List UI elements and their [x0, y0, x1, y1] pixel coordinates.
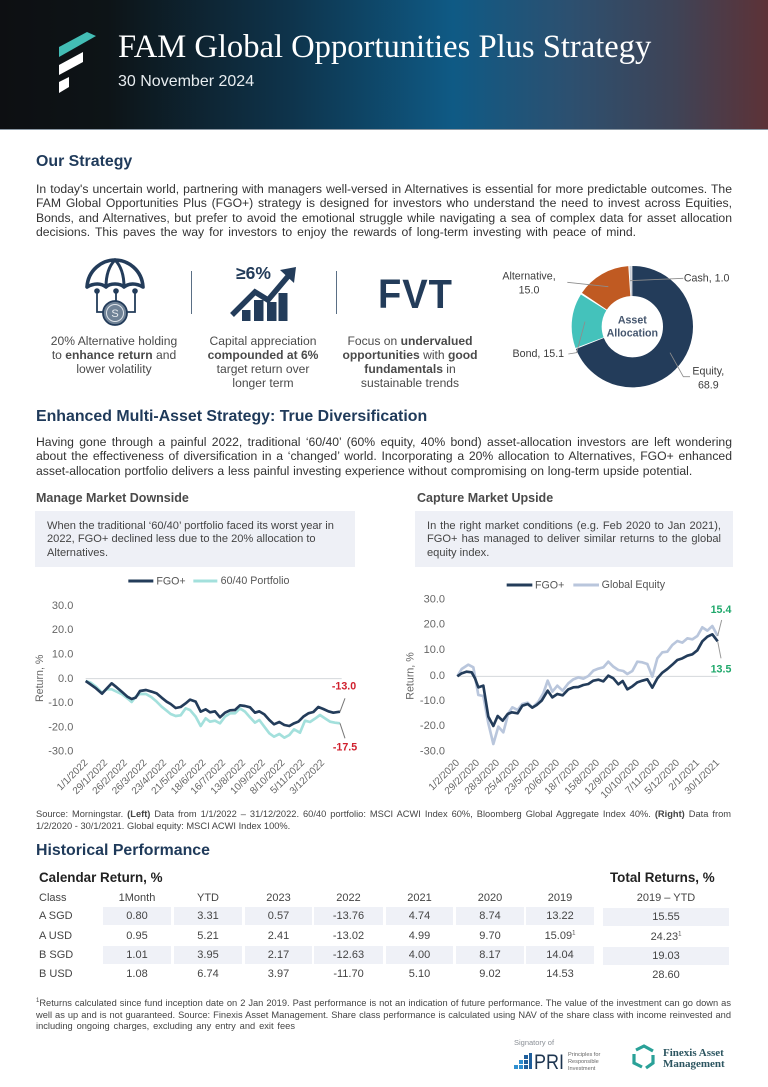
logo: Finexis Asset Management: Management	[663, 1058, 725, 1070]
row: A USD: -13.02	[333, 930, 364, 942]
x axis dates	[427, 757, 722, 801]
legend: FGO+	[535, 580, 564, 592]
divider	[336, 271, 337, 314]
logo: Finexis Asset Management	[632, 1044, 725, 1070]
logo: PRI signatory: Signatory of	[514, 1038, 555, 1047]
callout: downside: Alternatives.	[47, 546, 108, 558]
row: B SGD: 8.17	[479, 949, 501, 961]
heading: historical performance: Historical Performance	[36, 842, 210, 859]
row: A SGD: 4.74	[409, 910, 430, 922]
row: A SGD: 15.55	[652, 911, 680, 923]
row: A USD: 4.99	[409, 930, 430, 942]
icon: growth chart	[230, 263, 296, 321]
line: global equity	[457, 626, 718, 744]
row: A SGD: 0.57	[268, 910, 289, 922]
callout: downside: 2022, FGO+ declined less due to the 20% allocation to	[47, 533, 316, 545]
logo mark	[59, 32, 96, 93]
caption: alternative holding	[51, 334, 177, 376]
x axis dates: 16/7/2022	[189, 757, 228, 797]
x axis dates: 8/10/2022	[248, 757, 288, 797]
logo: PRI signatory: Principles for	[568, 1052, 600, 1058]
callout: downside: When the traditional ‘60/40’ portfolio faced its worst year in	[47, 520, 334, 532]
chart source note: 1/2/2020 - 30/1/2021. Global equity: MSCI ACWI Index 100%.	[36, 821, 290, 831]
row: B SGD: 3.95	[197, 949, 219, 961]
donut chart: asset allocation: 68.9	[698, 380, 719, 392]
title: FAM Global Opportunities Plus Strategy	[118, 29, 651, 65]
subheading: manage market downside: Manage Market Downside	[36, 491, 189, 505]
strategy paragraph: FAM Global Opportunities Plus (FGO+) strategy is designed for investors who understand the need to invest across Equities,	[36, 196, 732, 210]
y axis: -20.0	[48, 721, 73, 733]
donut chart: asset allocation: Equity,	[692, 365, 724, 377]
caption: capital appreciation: longer term	[232, 376, 294, 390]
donut chart: asset allocation: Asset	[618, 315, 647, 327]
column headers: YTD	[197, 892, 219, 904]
callout: upside: equity index.	[427, 546, 489, 558]
y axis: 10.0	[52, 649, 73, 661]
column headers: 2022	[336, 892, 361, 904]
column headers	[39, 892, 695, 904]
row: B USD: B USD	[39, 968, 73, 980]
x axis dates: 21/5/2022	[150, 757, 189, 797]
caption: capital appreciation: Capital appreciation	[210, 334, 316, 348]
end labels: 13.5	[711, 663, 731, 675]
footnote: including ongoing charges, excluding any entry and exit fees	[36, 1021, 295, 1031]
row: B USD: 28.60	[652, 969, 680, 981]
logo: Finexis Asset Management: Finexis Asset	[663, 1047, 724, 1059]
logo: PRI signatory: Investment	[568, 1066, 596, 1072]
line: 60/40 portfolio	[86, 681, 340, 738]
row: B SGD: 4.00	[409, 949, 430, 961]
callout: upside: FGO+ has managed to deliver similar returns to the global	[427, 533, 721, 545]
column headers: 2021	[407, 892, 432, 904]
caption: fvt focus: opportunities with good	[342, 348, 478, 362]
y axis: 10.0	[424, 644, 445, 656]
column headers: Class	[39, 892, 67, 904]
x axis dates: 29/1/2022	[71, 757, 110, 797]
y axis: 0.0	[430, 670, 445, 682]
row: A USD: 2.41	[268, 930, 289, 942]
column headers: 2023	[266, 892, 291, 904]
strategy paragraph: Bonds, and Alternatives, but prefer to avoid the emotional struggle while navigating a sea of complex data for asset allocation	[36, 211, 732, 225]
logo: PRI signatory: Responsible	[568, 1059, 599, 1065]
y axis: 20.0	[424, 619, 445, 631]
diversification paragraph: about the effectiveness of diversification in a ‘changed’ world. Incorporating a 20% allocation to Alternatives, FGO+ enhanced	[36, 449, 732, 463]
x axis dates: 7/11/2020	[623, 757, 662, 796]
row: B USD: 6.74	[197, 968, 219, 980]
donut chart: asset allocation: Cash, 1.0	[684, 273, 730, 285]
caption: capital appreciation: target return over	[217, 362, 309, 376]
x axis dates: 25/4/2020	[483, 757, 522, 797]
header banner	[0, 0, 768, 130]
x axis dates	[55, 757, 327, 797]
row: B USD: -11.70	[333, 968, 364, 980]
x axis dates: 30/1/2021	[683, 757, 722, 797]
logo: PRI signatory: PRI	[534, 1051, 564, 1074]
legend: FGO+	[156, 576, 186, 588]
x axis dates: 12/9/2020	[583, 757, 622, 797]
row: B SGD	[39, 946, 729, 965]
strategy paragraph: decisions. This paves the way for investors to enjoy the rewards of long-term investing with peace of mind.	[36, 225, 636, 239]
x axis dates: 23/5/2020	[503, 757, 542, 797]
row: B SGD: 14.04	[546, 949, 574, 961]
column headers: 2019 – YTD	[637, 892, 695, 904]
x axis dates: 15/8/2020	[563, 757, 602, 797]
row: B USD: 3.97	[268, 968, 289, 980]
caption: capital appreciation: compounded at 6%	[208, 348, 318, 362]
y axis: -30.0	[48, 746, 73, 758]
y axis	[34, 600, 73, 758]
x axis dates: 29/2/2020	[443, 757, 482, 797]
x axis dates: 10/9/2022	[229, 757, 268, 797]
row: A USD: 9.70	[479, 930, 501, 942]
chart source note	[36, 809, 731, 831]
column headers: 2019	[548, 892, 572, 904]
table title: total returns: Total Returns, %	[610, 870, 715, 885]
x axis dates: 2/1/2021	[667, 757, 702, 793]
legend: 60/40 Portfolio	[221, 575, 289, 587]
row: A USD: 0.95	[126, 930, 148, 942]
callout: upside: In the right market conditions (e.g. Feb 2020 to Jan 2021),	[427, 520, 721, 532]
x axis dates: 10/10/2020	[599, 757, 642, 801]
x axis dates: 28/3/2020	[463, 757, 502, 797]
row: A USD	[39, 930, 682, 943]
x axis dates: 13/8/2022	[209, 757, 248, 797]
caption: fvt focus: Focus on undervalued	[347, 334, 473, 348]
performance table	[39, 870, 729, 981]
legend: Global Equity	[602, 579, 666, 591]
diversification paragraph	[36, 435, 732, 478]
x axis dates: 3/12/2022	[288, 757, 327, 797]
y axis: 30.0	[52, 600, 73, 612]
strategy paragraph	[36, 182, 732, 239]
row: B USD: 14.53	[546, 968, 574, 980]
table title: calendar return: Calendar Return, %	[39, 870, 163, 885]
row: B SGD: 2.17	[268, 949, 289, 961]
end labels	[711, 604, 731, 675]
diversification paragraph: Having gone through a painful 2022, traditional ‘60/40’ (60% equity, 40% bond) asset-allocation investors are left wondering	[36, 435, 732, 449]
end labels	[332, 681, 357, 753]
y axis: 20.0	[52, 624, 73, 636]
diversification paragraph: asset-allocation portfolio delivers a less painful investing experience without compromising on long-term upside potential.	[36, 464, 692, 478]
x axis dates: 5/11/2022	[268, 757, 307, 796]
x axis dates: 18/6/2022	[169, 757, 209, 797]
caption: fvt focus: fundamentals in	[364, 362, 456, 376]
row: B USD: 1.08	[126, 968, 148, 980]
caption: alternative holding: to enhance return and	[52, 348, 176, 362]
heading: our strategy: Our Strategy	[36, 153, 132, 170]
y axis: -10.0	[420, 695, 445, 707]
row: A SGD: A SGD	[39, 910, 73, 922]
end labels: -17.5	[333, 741, 357, 753]
strategy paragraph: In today's uncertain world, partnering with managers well-versed in Alternatives is essential for more predictable outcomes. The	[36, 182, 732, 196]
y axis: -10.0	[48, 697, 73, 709]
icon: growth chart: ≥6%	[236, 263, 271, 283]
caption: capital appreciation	[208, 334, 318, 390]
report date: 30 November 2024	[118, 73, 254, 90]
footnote: 1Returns calculated since fund inception date on 2 Jan 2019. Past performance is not an indication of future performance. The value of the investment can go down as	[36, 998, 731, 1008]
donut chart: asset allocation: Bond, 15.1	[513, 348, 564, 360]
row: B SGD: B SGD	[39, 949, 73, 961]
footnote	[36, 998, 731, 1031]
caption: fvt focus	[342, 334, 478, 390]
row: A USD: 5.21	[197, 930, 219, 942]
y axis: Return, %	[34, 654, 46, 702]
row: A SGD: 3.31	[197, 910, 219, 922]
chart source note: Source: Morningstar. (Left) Data from 1/1/2022 – 31/12/2022. 60/40 portfolio: MSCI ACWI Index 60%, Bloomberg Global Aggregate Index 40%. (Right) Data from	[36, 809, 731, 819]
x axis dates: 26/3/2022	[110, 757, 150, 797]
row: A SGD: -13.76	[333, 910, 364, 922]
x axis dates: 1/1/2022	[55, 757, 91, 793]
caption: fvt focus: sustainable trends	[361, 376, 459, 390]
footnote: well as up and is not guaranteed. Source: Finexis Asset Management. Share class performance is calculated using NAV of the share class with income reinvested and	[36, 1010, 731, 1020]
row: A SGD: 8.74	[479, 910, 501, 922]
icon: FVT wordmark: FVT	[378, 271, 453, 317]
y axis: Return, %	[405, 652, 417, 700]
x axis dates: 18/7/2020	[543, 757, 582, 797]
caption: alternative holding: lower volatility	[76, 362, 152, 376]
line: FGO+	[86, 681, 340, 726]
y axis: 0.0	[58, 673, 73, 685]
logo: PRI signatory	[514, 1038, 600, 1074]
row: A SGD	[39, 907, 729, 926]
donut chart: asset allocation: Allocation	[607, 327, 658, 339]
row: A SGD: 0.80	[126, 910, 148, 922]
row: B SGD: -12.63	[333, 949, 364, 961]
donut chart: asset allocation: 15.0	[519, 284, 539, 296]
row: B SGD: 19.03	[652, 950, 680, 962]
y axis	[405, 594, 445, 757]
line chart: capture market upside	[405, 579, 732, 801]
donut chart: asset allocation: Alternative,	[502, 270, 556, 282]
row: A SGD: 13.22	[546, 910, 574, 922]
row: B SGD: 1.01	[126, 949, 148, 961]
end labels: -13.0	[332, 681, 356, 693]
y axis: 30.0	[424, 594, 445, 606]
line chart: manage market downside	[34, 575, 357, 797]
row: A USD: 24.231	[651, 931, 681, 943]
icon: umbrella with coin: S	[111, 308, 119, 320]
row: A USD: 15.091	[545, 930, 575, 942]
donut chart: asset allocation	[502, 266, 730, 392]
column headers: 1Month	[119, 892, 155, 904]
legend	[128, 575, 289, 588]
caption: alternative holding: 20% Alternative holding	[51, 334, 177, 348]
row: B USD: 9.02	[479, 968, 501, 980]
divider	[191, 271, 192, 314]
heading: enhanced multi-asset strategy: Enhanced Multi-Asset Strategy: True Diversification	[36, 408, 427, 425]
end labels: 15.4	[711, 604, 731, 616]
y axis: -30.0	[420, 745, 445, 757]
line: FGO+	[457, 634, 718, 726]
column headers: 2020	[478, 892, 502, 904]
subheading: capture market upside: Capture Market Upside	[417, 491, 553, 505]
callout: upside	[415, 511, 733, 567]
x axis dates: 23/4/2022	[130, 757, 169, 797]
x axis dates: 26/2/2022	[91, 757, 130, 797]
y axis: -20.0	[420, 720, 445, 732]
x axis dates: 20/6/2020	[523, 757, 562, 797]
icon: umbrella with coin	[85, 258, 145, 326]
legend	[507, 579, 666, 592]
row: B USD	[39, 968, 680, 981]
x axis dates: 5/12/2020	[643, 757, 682, 797]
row: A USD: A USD	[39, 930, 72, 942]
callout: downside	[35, 511, 355, 567]
row: B USD: 5.10	[409, 968, 430, 980]
x axis dates: 1/2/2020	[427, 757, 462, 793]
